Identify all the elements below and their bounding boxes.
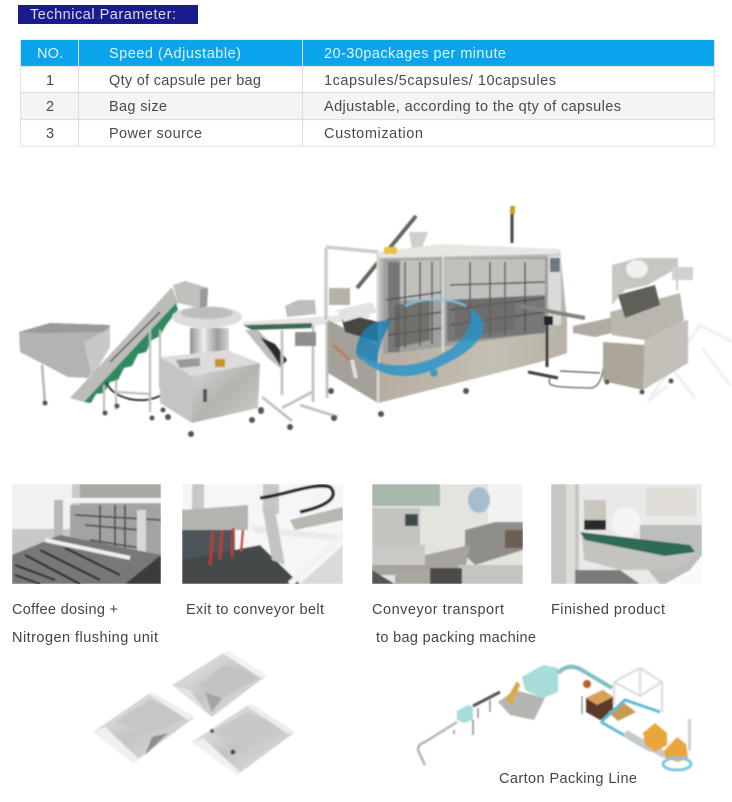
main filling and sealing machine [326, 206, 567, 417]
teal packing machine [498, 665, 558, 720]
caption: exit to conveyor: Exit to conveyor belt [186, 602, 324, 618]
table row 3: 3 [46, 126, 54, 142]
overhead conveyor [558, 667, 612, 688]
main production line photo [19, 206, 693, 437]
foil bags [93, 651, 295, 775]
caption: carton packing line: Carton Packing Line [499, 771, 637, 787]
table row 3: Customization [324, 126, 423, 142]
caption: conveyor transport: to bag packing machine [376, 630, 536, 646]
foil bag: left [93, 692, 195, 763]
parameter table [20, 40, 714, 146]
robot and cartons [582, 680, 636, 721]
table row 2: 2 [46, 99, 54, 115]
table row 2: Adjustable, according to the qty of capsules [324, 99, 621, 115]
photo: conveyor transport [372, 484, 523, 584]
heading: Technical Parameter: Technical Parameter: [30, 7, 176, 23]
foil bag: top [172, 651, 267, 717]
blue watermark logo [356, 299, 484, 377]
table header row: NO. [37, 46, 63, 62]
palletizer frame [614, 668, 662, 712]
finished pallets [643, 719, 691, 770]
table row 1 [46, 73, 556, 89]
caption: coffee dosing: Nitrogen flushing unit [12, 630, 158, 646]
table header row: 20-30packages per minute [324, 46, 506, 62]
photo: finished product [551, 484, 702, 584]
table row 2 [46, 99, 621, 115]
table row 3: Power source [109, 126, 202, 142]
caption: finished product: Finished product [551, 602, 665, 618]
bottle feed line [418, 700, 490, 765]
caption: conveyor transport: Conveyor transport [372, 602, 504, 618]
photo: exit to conveyor belt [182, 484, 343, 584]
heading: Technical Parameter [18, 5, 198, 24]
table row 2: Bag size [109, 99, 167, 115]
foil bag: right [192, 704, 295, 775]
inclined conveyor [70, 287, 178, 420]
table header row: Speed (Adjustable) [109, 46, 241, 62]
flow wrapping machine [603, 258, 693, 394]
carton packing line diagram [418, 665, 691, 770]
teal filling unit [457, 705, 473, 723]
table row 1: 1capsules/5capsules/ 10capsules [324, 73, 556, 89]
dark conveyor [473, 692, 500, 706]
bowl cabinet [160, 350, 264, 437]
output conveyor [520, 306, 657, 388]
table header row [37, 46, 506, 62]
table row 1: 1 [46, 73, 54, 89]
transfer conveyor table [243, 300, 370, 430]
caption: coffee dosing [12, 602, 158, 646]
table row 1: Qty of capsule per bag [109, 73, 261, 89]
vibratory bowl [172, 281, 242, 358]
captions under photos [12, 602, 665, 646]
caption: coffee dosing: Coffee dosing + [12, 602, 118, 618]
watermark [648, 325, 732, 402]
caption: conveyor transport [372, 602, 536, 646]
hopper [19, 323, 110, 406]
blue pallet conveyor [601, 700, 665, 755]
table row 3 [46, 126, 423, 142]
photo: coffee dosing [12, 484, 161, 584]
